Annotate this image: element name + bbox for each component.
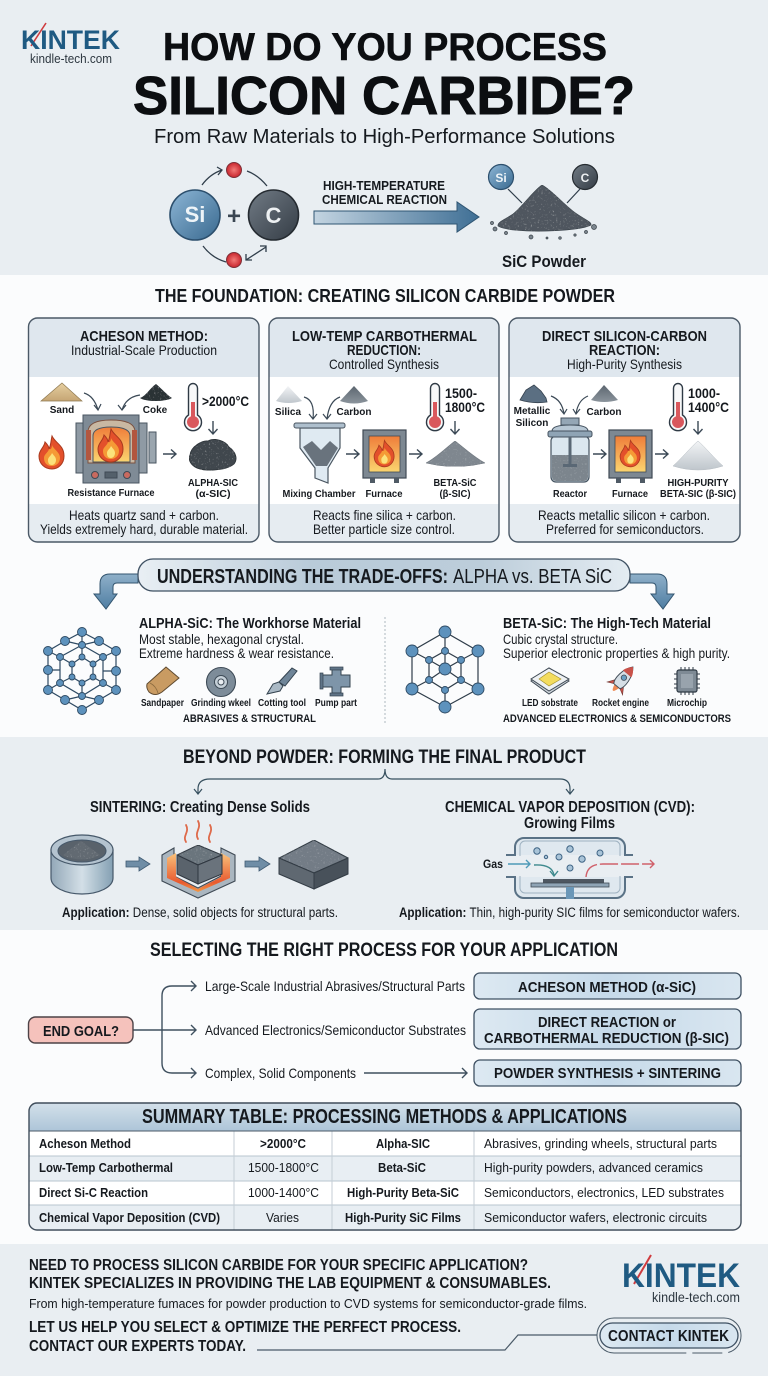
panel: Acheson method: (α-SIC) (196, 488, 230, 500)
icon: alpha crystal lattice (44, 628, 120, 714)
panel: Acheson method: Resistance Furnace (68, 487, 155, 499)
panel: direct silicon-carbon reaction: Carbon (586, 407, 622, 418)
icon: beta crystal lattice (406, 626, 484, 713)
icon: grinding wheel (206, 668, 236, 696)
icon: SiC powder pile: Si (495, 171, 507, 185)
decision flow: Advanced Electronics/Semiconductor Substrates (205, 1022, 466, 1038)
icon: cutting tool (267, 668, 297, 694)
panel: alpha SiC: Grinding wkeel (191, 698, 251, 709)
panel: sintering (51, 799, 348, 920)
panel: Acheson method: ACHESON METHOD: (80, 328, 208, 345)
panel: low-temp carbothermal reduction: REDUCTION: (347, 342, 421, 359)
heading pill: understanding the trade-offs: UNDERSTANDING THE TRADE-OFFS: (157, 566, 448, 588)
panel: direct silicon-carbon reaction: Silicon (516, 418, 548, 429)
panel: Acheson method: >2000°C (202, 393, 249, 409)
footer call to action text (29, 1257, 587, 1355)
icon: beta SiC pile (426, 441, 485, 466)
icon: LED substrate (531, 668, 569, 694)
title: HOW DO YOU PROCESS (163, 26, 607, 69)
panel: direct silicon-carbon reaction: REACTION: (589, 342, 660, 359)
panel: beta SiC: Microchip (667, 698, 707, 709)
box: direct reaction or carbothermal: CARBOTHERMAL REDUCTION (β-SIC) (484, 1030, 729, 1047)
table row: low-temp carbothermal: 1500-1800°C (248, 1160, 319, 1175)
table row: CVD: Semiconductor wafers, electronic circuits (484, 1210, 707, 1225)
icon: resistance furnace (76, 415, 156, 483)
table row: CVD (39, 1210, 707, 1225)
table row: CVD: Chemical Vapor Deposition (CVD) (39, 1210, 220, 1225)
heading: beyond powder: BEYOND POWDER: FORMING THE FINAL PRODUCT (183, 747, 586, 768)
icon: mixing chamber (294, 423, 345, 483)
panel: Acheson method: ALPHA-SIC (188, 477, 238, 489)
table row: low-temp carbothermal: Beta-SiC (378, 1160, 427, 1175)
arrow: decision branches (133, 981, 467, 1078)
table row: Acheson: >2000°C (260, 1136, 307, 1151)
panel: direct silicon-carbon reaction: HIGH-PURITY (668, 477, 728, 489)
panel: low-temp carbothermal reduction: Silica (275, 407, 301, 418)
panel: chemical vapor deposition: Gas (483, 857, 503, 871)
box: powder synthesis plus sintering (474, 1060, 741, 1086)
panel: beta SiC: ADVANCED ELECTRONICS & SEMICONDUCTORS (503, 713, 731, 725)
panel: low-temp carbothermal reduction (269, 318, 499, 542)
arrow: crucible to furnace (126, 857, 150, 871)
icon: SiC powder pile: SiC Powder (502, 252, 586, 271)
icon: dense solid block (279, 840, 348, 889)
arrow: heat to product (208, 421, 218, 434)
decision flow: Complex, Solid Components (205, 1065, 356, 1081)
panel: beta SiC: BETA-SiC: The High-Tech Material (503, 615, 711, 632)
table row: Acheson: Acheson Method (39, 1136, 131, 1151)
icon: sandpaper (147, 667, 179, 694)
icon: furnace (363, 430, 406, 483)
icon: crucible with powder (51, 835, 113, 894)
table row: Acheson: Abrasives, grinding wheels, structural parts (484, 1136, 717, 1151)
table row: low-temp carbothermal (39, 1160, 703, 1175)
table row: CVD: Varies (266, 1210, 299, 1225)
logo: Kintek footer: KINTEK (622, 1257, 740, 1295)
logo: Kintek footer: kindle-tech.com (652, 1289, 740, 1305)
panel: low-temp carbothermal reduction: 1500- (445, 386, 477, 401)
diagram: Si plus C reaction atoms: C (266, 203, 282, 228)
table row: Acheson: Alpha-SIC (376, 1136, 431, 1151)
footer call to action text: NEED TO PROCESS SILICON CARBIDE FOR YOUR SPECIFIC APPLICATION? (29, 1257, 528, 1274)
panel: alpha SiC: Sandpaper (141, 698, 184, 709)
panel: low-temp carbothermal reduction: BETA-SiC (434, 477, 477, 489)
icon: carbon (591, 385, 618, 402)
panel: alpha SiC: Pump part (315, 698, 358, 709)
panel: Acheson method: Yields extremely hard, durable material. (40, 521, 248, 537)
heading pill: understanding the trade-offs (138, 559, 630, 591)
arrow: furnace to solid (245, 857, 270, 871)
panel: direct silicon-carbon reaction: Reactor (553, 488, 587, 500)
panel: low-temp carbothermal reduction: (β-SIC) (440, 488, 470, 500)
box: Acheson method: ACHESON METHOD (α-SiC) (518, 979, 696, 996)
icon: reactor (548, 418, 592, 482)
diagram: Si plus C reaction atoms: + (227, 203, 241, 230)
arrow: heat to product (694, 421, 702, 434)
panel: beta SiC: Rocket engine (592, 698, 649, 709)
icon: thermometer (670, 384, 686, 431)
icon: SiC powder pile (488, 164, 598, 271)
icon: alpha SiC rock (189, 439, 236, 470)
icon: metallic silicon (520, 385, 547, 403)
panel: alpha SiC: ALPHA-SiC: The Workhorse Material (139, 615, 361, 632)
panel: alpha SiC: Extreme hardness & wear resistance. (139, 645, 334, 661)
arrow: furnace to product (409, 450, 422, 458)
heading pill: understanding the trade-offs: ALPHA vs. BETA SiC (453, 566, 612, 588)
panel: chemical vapor deposition (399, 799, 740, 920)
table row: CVD: High-Purity SiC Films (345, 1210, 461, 1225)
table row: direct Si-C reaction: Direct Si-C Reaction (39, 1185, 148, 1200)
arrow: high-temperature chemical reaction: HIGH-TEMPERATURE (323, 178, 445, 193)
table row: direct Si-C reaction: High-Purity Beta-SiC (347, 1185, 460, 1200)
panel: low-temp carbothermal reduction: LOW-TEMP CARBOTHERMAL (292, 328, 477, 345)
box: direct reaction or carbothermal (474, 1009, 741, 1049)
logo: Kintek header (21, 23, 120, 66)
panel: low-temp carbothermal reduction: 1800°C (445, 400, 485, 415)
panel: low-temp carbothermal reduction: Controlled Synthesis (329, 356, 439, 372)
panel: direct silicon-carbon reaction: Furnace (612, 488, 648, 500)
decision flow: Large-Scale Industrial Abrasives/Structural Parts (205, 978, 465, 994)
table row: direct Si-C reaction: Semiconductors, electronics, LED substrates (484, 1185, 724, 1200)
panel: low-temp carbothermal reduction: Mixing Chamber (282, 488, 356, 500)
panel: direct silicon-carbon reaction: 1000- (688, 386, 720, 401)
arrow: bracket splitting to sintering and CVD (194, 769, 574, 794)
icon: flame (39, 436, 64, 469)
summary table: SUMMARY TABLE: PROCESSING METHODS & APPLICATIONS (142, 1106, 627, 1128)
panel: beta SiC (406, 615, 731, 725)
icon: sintering furnace (162, 821, 235, 898)
panel: low-temp carbothermal reduction: Better particle size control. (313, 521, 455, 537)
box: end goal: END GOAL? (43, 1023, 119, 1040)
arrow: heat to product (450, 421, 460, 434)
panel: beta SiC: LED sobstrate (522, 698, 578, 709)
panel: alpha SiC: Most stable, hexagonal crystal. (139, 631, 304, 647)
panel: low-temp carbothermal reduction: Carbon (336, 407, 372, 418)
button: contact Kintek (597, 1318, 741, 1353)
arrow: right trade-off branch (630, 574, 674, 609)
logo: Kintek header: KINTEK (21, 25, 120, 55)
panel: Acheson method (28, 318, 259, 542)
arrow: left trade-off branch (94, 574, 138, 609)
arrow: chamber to furnace (346, 450, 359, 458)
table row: direct Si-C reaction: 1000-1400°C (248, 1185, 319, 1200)
title: SILICON CARBIDE? (133, 66, 635, 126)
panel: sintering: Application: Dense, solid objects for structural parts. (62, 905, 338, 920)
title (133, 26, 635, 126)
heading: selecting the right process: SELECTING THE RIGHT PROCESS FOR YOUR APPLICATION (150, 940, 618, 961)
box: end goal (28, 1017, 133, 1043)
footer call to action text: KINTEK SPECIALIZES IN PROVIDING THE LAB EQUIPMENT & CONSUMABLES. (29, 1275, 551, 1292)
panel: direct silicon-carbon reaction: Preferred for semiconductors. (546, 521, 704, 537)
icon: thermometer (184, 384, 202, 431)
arrow: reactor to furnace (593, 450, 606, 458)
icon: thermometer (426, 384, 444, 431)
footer call to action text: LET US HELP YOU SELECT & OPTIMIZE THE PERFECT PROCESS. (29, 1319, 461, 1336)
arrow: high-temperature chemical reaction: CHEMICAL REACTION (322, 192, 447, 207)
panel: chemical vapor deposition: CHEMICAL VAPOR DEPOSITION (CVD): (445, 799, 695, 816)
arrow: connector line to contact button (257, 1335, 597, 1350)
logo: Kintek header: kindle-tech.com (30, 51, 112, 66)
panel: Acheson method: Coke (143, 405, 168, 416)
panel: alpha SiC: Cotting tool (258, 698, 306, 709)
panel: direct silicon-carbon reaction: Metallic (514, 406, 551, 417)
table row: low-temp carbothermal: High-purity powders, advanced ceramics (484, 1160, 703, 1175)
panel: direct silicon-carbon reaction (509, 318, 740, 542)
table row: low-temp carbothermal: Low-Temp Carbothermal (39, 1160, 173, 1175)
footer call to action text: CONTACT OUR EXPERTS TODAY. (29, 1338, 246, 1355)
panel: low-temp carbothermal reduction: Reacts fine silica + carbon. (313, 507, 456, 523)
panel: Acheson method: Sand (50, 405, 74, 416)
heading: the foundation: THE FOUNDATION: CREATING SILICON CARBIDE POWDER (155, 286, 615, 306)
panel: direct silicon-carbon reaction: 1400°C (688, 400, 729, 415)
icon: rocket (605, 661, 641, 697)
icon: furnace (609, 430, 652, 483)
box: direct reaction or carbothermal: DIRECT REACTION or (538, 1014, 676, 1031)
arrow: furnace to product (163, 450, 176, 458)
diagram: Si plus C reaction atoms (170, 162, 298, 268)
summary table (29, 1103, 741, 1230)
icon: sand (41, 383, 82, 401)
panel: direct silicon-carbon reaction: Reacts metallic silicon + carbon. (538, 507, 710, 523)
decision flow (28, 973, 741, 1086)
diagram: Si plus C reaction atoms: Si (185, 202, 205, 227)
panel: beta SiC: Cubic crystal structure. (503, 631, 618, 647)
panel: beta SiC: Superior electronic properties & high purity. (503, 645, 730, 661)
icon: SiC powder pile: C (581, 171, 590, 185)
button: contact Kintek: CONTACT KINTEK (608, 1328, 730, 1345)
icon: coke (140, 384, 172, 401)
icon: CVD chamber (506, 838, 654, 899)
panel: alpha SiC: ABRASIVES & STRUCTURAL (183, 713, 316, 725)
panel: chemical vapor deposition: Growing Films (524, 815, 615, 832)
box: Acheson method (474, 973, 741, 999)
box: powder synthesis plus sintering: POWDER SYNTHESIS + SINTERING (494, 1065, 721, 1082)
panel: direct silicon-carbon reaction: BETA-SIC (β-SIC) (660, 488, 736, 500)
icon: high-purity beta SiC pile (673, 441, 723, 470)
panel: low-temp carbothermal reduction: Furnace (366, 488, 403, 500)
icon: carbon (340, 386, 368, 404)
icon: silica (276, 386, 302, 403)
icon: microchip (674, 667, 700, 695)
panel: Acheson method: Industrial-Scale Production (71, 342, 217, 358)
arrow: high-temperature chemical reaction (314, 178, 479, 232)
panel: alpha SiC (44, 615, 361, 725)
panel: Acheson method: Heats quartz sand + carbon. (69, 507, 219, 523)
arrow: furnace to product (655, 450, 668, 458)
panel: direct silicon-carbon reaction: DIRECT SILICON-CARBON (542, 328, 707, 345)
table row: Acheson (39, 1136, 717, 1151)
panel: sintering: SINTERING: Creating Dense Solids (90, 799, 310, 816)
subtitle: From Raw Materials to High-Performance Solutions (154, 126, 615, 148)
panel: direct silicon-carbon reaction: High-Purity Synthesis (567, 356, 682, 372)
footer call to action text: From high-temperature fumaces for powder production to CVD systems for semiconductor-grade films. (29, 1296, 587, 1311)
icon: pump part (320, 667, 350, 696)
table row: direct Si-C reaction (39, 1185, 724, 1200)
